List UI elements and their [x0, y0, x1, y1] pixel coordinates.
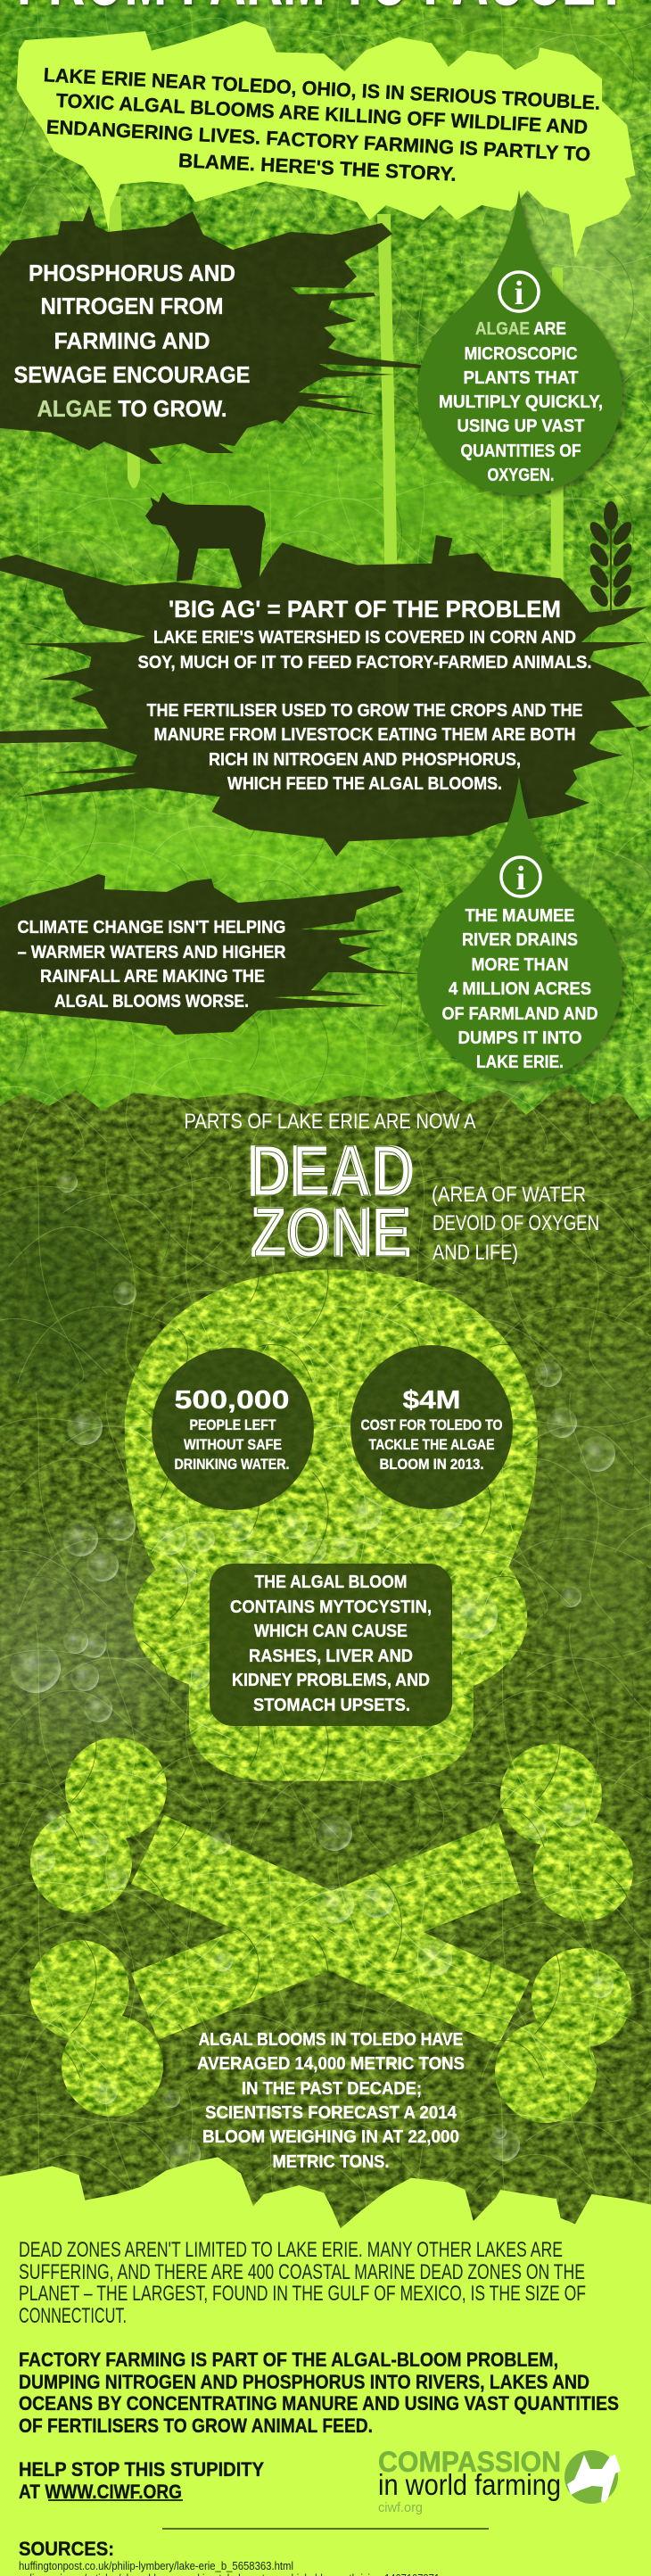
- logo: compassion in world farming: COMPASSION: [378, 2446, 561, 2478]
- logo: compassion in world farming: ciwf.org: [378, 2500, 423, 2515]
- info drop: algae: OXYGEN.: [487, 466, 555, 485]
- right eye stat: $4M: [403, 1386, 460, 1415]
- phosphorus text: [14, 260, 250, 422]
- dead zone heading: DEAD: [248, 1131, 414, 1210]
- footer paragraph: factory farming: [19, 2349, 619, 2437]
- climate text: [18, 918, 286, 1011]
- dark splat: big ag: [0, 535, 651, 856]
- climate text: RAINFALL ARE MAKING THE: [40, 967, 265, 987]
- lime footer panel: [0, 2157, 651, 2576]
- left eye stat: WITHOUT SAFE: [184, 1436, 282, 1453]
- call to action: [19, 2458, 264, 2503]
- big ag text: SOY, MUCH OF IT TO FEED FACTORY-FARMED ANIMALS.: [137, 653, 592, 673]
- logo: compassion in world farming: in world farming: [378, 2468, 561, 2501]
- right eye stat: COST FOR TOLEDO TO: [360, 1416, 503, 1433]
- info drop: maumee river: i: [516, 860, 525, 897]
- left eye stat: DRINKING WATER.: [175, 1456, 289, 1473]
- climate text: CLIMATE CHANGE ISN'T HELPING: [18, 918, 285, 937]
- big ag text: [137, 596, 592, 794]
- nose box: KIDNEY PROBLEMS, AND: [232, 1671, 430, 1690]
- big ag text: RICH IN NITROGEN AND PHOSPHORUS,: [209, 750, 521, 770]
- intro text: TOXIC ALGAL BLOOMS ARE KILLING OFF WILDLIFE AND: [55, 89, 589, 138]
- info drop: maumee river: MORE THAN: [471, 955, 569, 975]
- phosphorus text: ALGAE TO GROW.: [37, 395, 227, 422]
- nose box: THE ALGAL BLOOM: [255, 1573, 407, 1592]
- toledo tonnage text: IN THE PAST DECADE;: [242, 2079, 422, 2099]
- toledo tonnage text: SCIENTISTS FORECAST A 2014: [205, 2103, 457, 2123]
- info drop: maumee river: 4 MILLION ACRES: [449, 979, 591, 999]
- dead zone heading: ZONE: [251, 1193, 411, 1271]
- call to action: AT WWW.CIWF.ORG: [19, 2481, 182, 2503]
- info drop: algae: USING UP VAST: [457, 417, 585, 436]
- info drop: algae: MULTIPLY QUICKLY,: [439, 392, 603, 412]
- divider: [162, 2528, 489, 2530]
- info drop: maumee river: LAKE ERIE.: [476, 1053, 564, 1072]
- background: dark dead-zone algae: [0, 1079, 651, 2230]
- nose box: STOMACH UPSETS.: [253, 1696, 410, 1715]
- dead zone heading: PARTS OF LAKE ERIE ARE NOW A: [184, 1110, 476, 1134]
- info drop: algae: [417, 190, 622, 495]
- toledo tonnage text: ALGAL BLOOMS IN TOLEDO HAVE: [198, 2030, 464, 2050]
- info drop: algae: PLANTS THAT: [464, 368, 578, 388]
- skull and crossbones: [29, 1269, 633, 2123]
- info drop: maumee river: [417, 776, 622, 1081]
- left eye stat: 500,000: [175, 1386, 289, 1415]
- dead zone heading: DEAD: [251, 1131, 411, 1210]
- info drop: algae: ALGAE ARE: [475, 319, 566, 339]
- right eye stat: TACKLE THE ALGAE: [369, 1436, 494, 1453]
- toledo tonnage text: METRIC TONS.: [273, 2152, 389, 2172]
- toledo tonnage text: [197, 2030, 465, 2172]
- toledo tonnage text: BLOOM WEIGHING IN AT 22,000: [202, 2127, 459, 2147]
- info drop: algae: MICROSCOPIC: [464, 344, 578, 364]
- sources: [19, 2538, 440, 2576]
- info drop: maumee river: DUMPS IT INTO: [458, 1028, 581, 1048]
- dark splat: climate change: [0, 874, 419, 1035]
- lime intro splat: [17, 21, 635, 259]
- dead zone heading: (AREA OF WATER: [432, 1183, 586, 1207]
- intro text: ENDANGERING LIVES. FACTORY FARMING IS PARTLY TO: [45, 116, 591, 165]
- nose box: CONTAINS MYTOCYSTIN,: [230, 1598, 432, 1617]
- info drop: maumee river: RIVER DRAINS: [462, 930, 578, 950]
- big ag text: WHICH FEED THE ALGAL BLOOMS.: [227, 774, 502, 794]
- logo: compassion in world farming: [378, 2446, 621, 2515]
- phosphorus text: FARMING AND: [54, 327, 210, 354]
- footer paragraph: factory farming: DUMPING NITROGEN AND PHOSPHORUS INTO RIVERS, LAKES AND: [19, 2371, 589, 2393]
- intro text: [43, 63, 601, 186]
- dead zone heading: ZONE: [253, 1193, 408, 1271]
- intro text: BLAME. HERE'S THE STORY.: [178, 149, 457, 186]
- sources: huffingtonpost.co.uk/philip-lymbery/lake-erie_b_5658363.html: [19, 2559, 293, 2572]
- dark splat: phosphorus: [0, 205, 428, 464]
- nose box: WHICH CAN CAUSE: [254, 1622, 408, 1641]
- right eye stat: BLOOM IN 2013.: [380, 1456, 483, 1473]
- phosphorus text: SEWAGE ENCOURAGE: [14, 361, 250, 388]
- dead zone heading: AND LIFE): [433, 1241, 518, 1265]
- footer paragraph: factory farming: FACTORY FARMING IS PART OF THE ALGAL-BLOOM PROBLEM,: [19, 2349, 558, 2371]
- info drop: algae: QUANTITIES OF: [460, 442, 581, 461]
- info drop: algae: i: [515, 275, 523, 312]
- big ag text: THE FERTILISER USED TO GROW THE CROPS AND THE: [146, 701, 583, 721]
- dead zone heading: [184, 1110, 599, 1271]
- climate text: – WARMER WATERS AND HIGHER: [18, 943, 286, 962]
- footer paragraph: dead zones: CONNECTICUT.: [19, 2304, 127, 2328]
- green drips: [107, 196, 564, 813]
- info drop: maumee river: THE MAUMEE: [466, 906, 574, 926]
- background: bright algae: [0, 0, 651, 1195]
- dead zone heading: DEVOID OF OXYGEN: [433, 1211, 599, 1235]
- left eye stat: PEOPLE LEFT: [189, 1416, 276, 1433]
- bubbles: [11, 1171, 615, 2172]
- left eye stat: [152, 1348, 314, 1510]
- big ag text: LAKE ERIE'S WATERSHED IS COVERED IN CORN AND: [153, 628, 576, 648]
- nose box: RASHES, LIVER AND: [249, 1647, 413, 1666]
- footer paragraph: factory farming: OF FERTILISERS TO GROW ANIMAL FEED.: [19, 2415, 373, 2437]
- big ag text: 'BIG AG' = PART OF THE PROBLEM: [169, 596, 561, 623]
- right eye stat: [350, 1345, 513, 1509]
- phosphorus text: NITROGEN FROM: [41, 293, 223, 319]
- nose box: [210, 1564, 452, 1726]
- climate text: ALGAL BLOOMS WORSE.: [54, 992, 249, 1011]
- intro text: LAKE ERIE NEAR TOLEDO, OHIO, IS IN SERIOUS TROUBLE.: [43, 63, 601, 114]
- wheat icon: [587, 501, 635, 615]
- footer paragraph: dead zones: [19, 2238, 586, 2328]
- info drop: maumee river: OF FARMLAND AND: [442, 1004, 597, 1024]
- cow silhouette: [145, 492, 266, 590]
- phosphorus text: PHOSPHORUS AND: [29, 260, 235, 286]
- big ag text: MANURE FROM LIVESTOCK EATING THEM ARE BOTH: [153, 725, 576, 745]
- toledo tonnage text: AVERAGED 14,000 METRIC TONS: [197, 2054, 465, 2074]
- sources: SOURCES:: [19, 2538, 114, 2560]
- call to action: HELP STOP THIS STUPIDITY: [19, 2458, 264, 2481]
